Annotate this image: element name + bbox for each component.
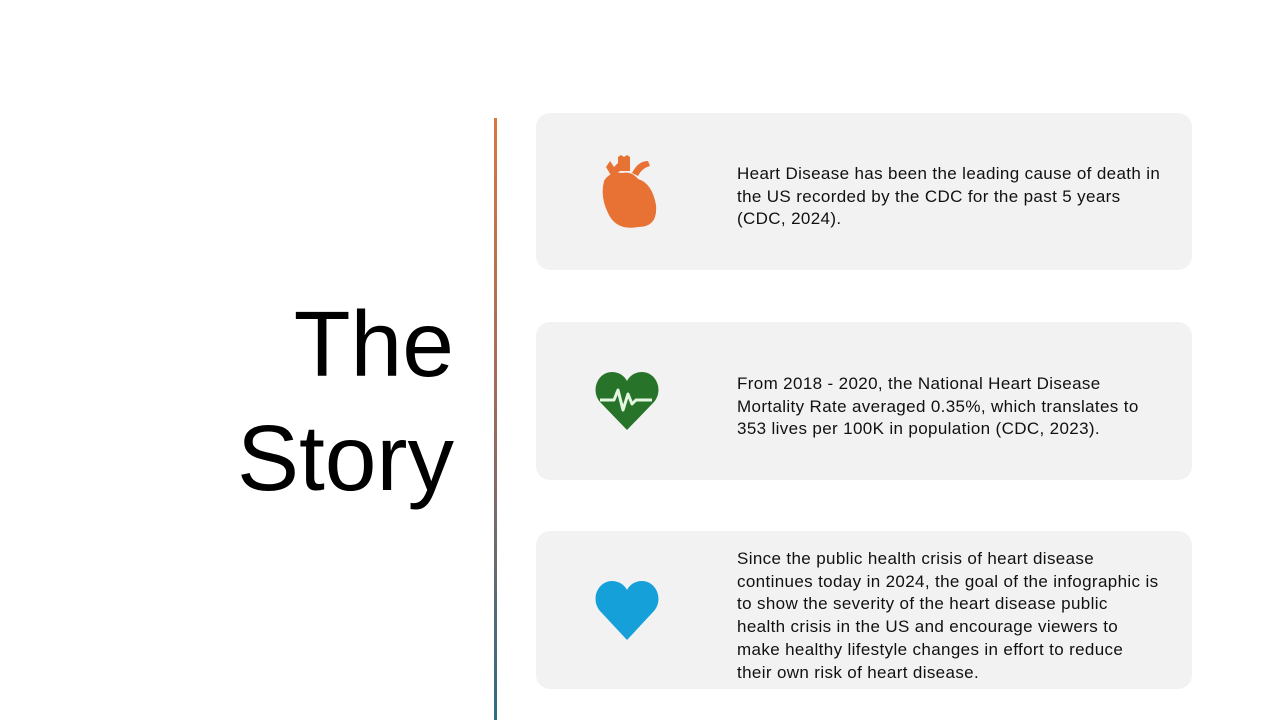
text block: to show the severity of the heart disease public bbox=[737, 594, 1108, 613]
icon: anatomical heart bbox=[602, 155, 656, 228]
text block bbox=[737, 549, 1158, 682]
text block: their own risk of heart disease. bbox=[737, 663, 979, 682]
text block: From 2018 - 2020, the National Heart Disease bbox=[737, 374, 1101, 393]
title: Story bbox=[237, 406, 454, 510]
text block bbox=[737, 374, 1139, 438]
text block: the US recorded by the CDC for the past 5 years bbox=[737, 187, 1121, 206]
text block: (CDC, 2024). bbox=[737, 209, 841, 228]
text block: Heart Disease has been the leading cause of death in bbox=[737, 164, 1160, 183]
text block: 353 lives per 100K in population (CDC, 2023). bbox=[737, 419, 1100, 438]
panel: card 1 bbox=[536, 113, 1192, 270]
vertical gradient divider line bbox=[494, 118, 497, 720]
title bbox=[237, 292, 454, 510]
icon: blue heart bbox=[596, 581, 658, 640]
icon: heart with pulse bbox=[596, 372, 658, 430]
panel: card 2 bbox=[536, 322, 1192, 480]
text block: make healthy lifestyle changes in effort to reduce bbox=[737, 640, 1123, 659]
text block: Mortality Rate averaged 0.35%, which translates to bbox=[737, 397, 1139, 416]
panel: card 3 bbox=[536, 531, 1192, 689]
text block: continues today in 2024, the goal of the infographic is bbox=[737, 572, 1158, 591]
text block: Since the public health crisis of heart disease bbox=[737, 549, 1094, 568]
text block: health crisis in the US and encourage viewers to bbox=[737, 617, 1118, 636]
title: The bbox=[294, 292, 454, 396]
text block bbox=[737, 164, 1160, 228]
